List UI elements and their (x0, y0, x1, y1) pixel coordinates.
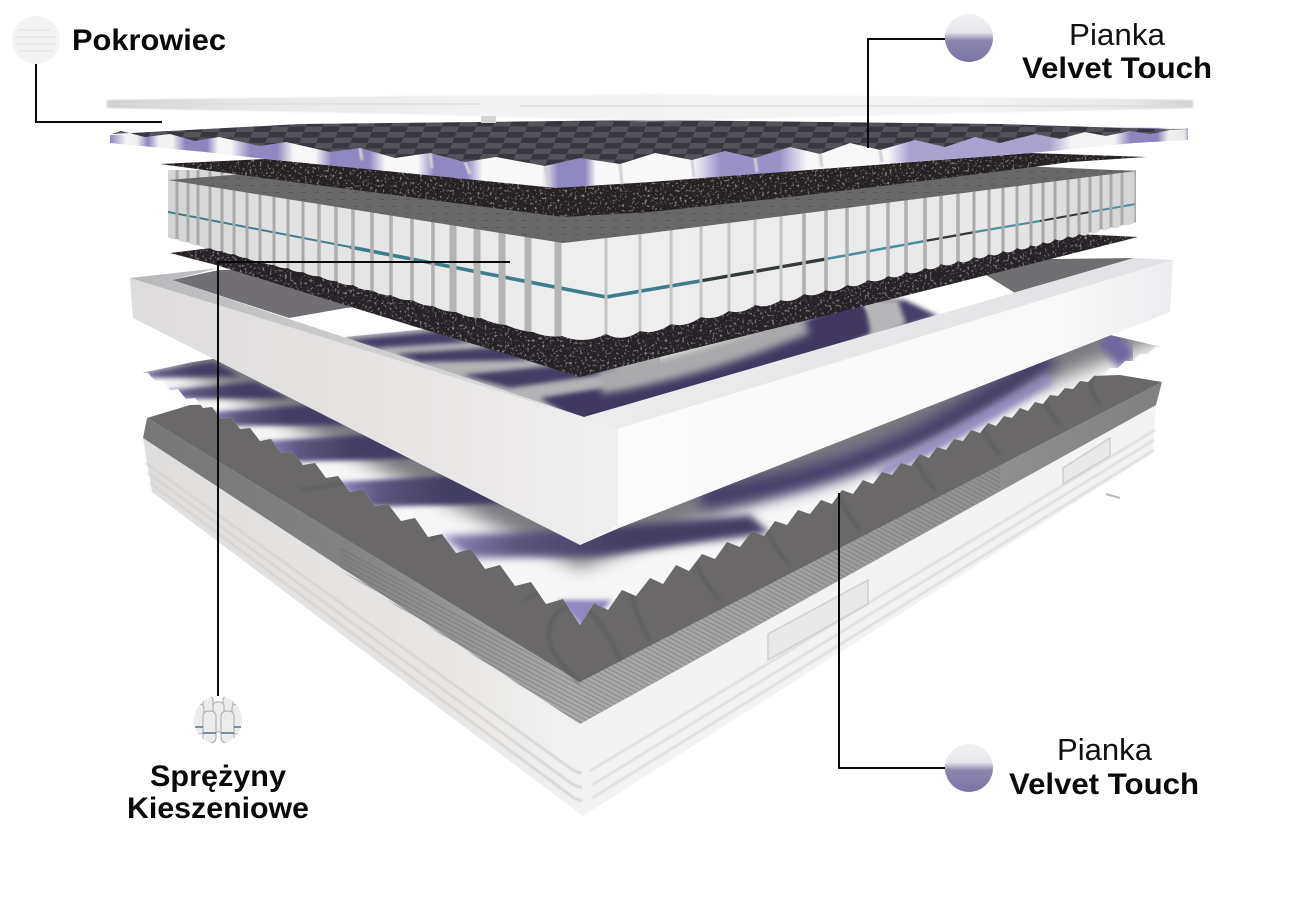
mattress grey mesh band (143, 382, 1162, 724)
icon: pocket springs sample (193, 696, 243, 744)
upper foam: Velvet Touch (110, 120, 1190, 188)
callout: Pianka Velvet Touch bottom (945, 732, 1199, 801)
connector lines (36, 39, 945, 768)
upper felt sheet (160, 153, 1146, 217)
mattress left side (143, 438, 592, 816)
label Pianka top: Pianka (1069, 17, 1166, 52)
tip purple (558, 600, 612, 630)
label Kieszeniowe: Kieszeniowe (127, 792, 309, 825)
frame opening view (172, 258, 1134, 417)
foam frame (130, 258, 1173, 545)
cover layer (107, 94, 1193, 123)
foam side (110, 125, 1188, 188)
cover tag (481, 116, 496, 123)
grey swoosh under felt (600, 322, 805, 382)
foam top surface (112, 120, 1190, 166)
lower felt sheet (170, 225, 1138, 377)
base mattress (143, 372, 1162, 816)
mattress quilted top (147, 372, 1162, 682)
label Pianka bottom: Pianka (1057, 732, 1153, 767)
frame top left strip (130, 268, 618, 428)
right swoosh (700, 356, 1050, 498)
spring top grey cover (168, 165, 1136, 243)
frame top right strip (584, 258, 1173, 428)
lower foam: Velvet Touch (142, 335, 1162, 625)
icon: cover fabric (12, 16, 60, 64)
label Pokrowiec: Pokrowiec (72, 24, 226, 57)
frame right face (580, 260, 1173, 545)
spring bands (168, 204, 1136, 297)
spring gaps near (450, 225, 562, 336)
long stripe centre (442, 515, 770, 558)
pocket springs (168, 170, 1136, 340)
label Sprezyny: Sprężyny (150, 760, 286, 793)
purple stripes left (141, 362, 530, 507)
right purple and grey patch (880, 300, 938, 335)
callout: Pianka Velvet Touch top (945, 14, 1212, 85)
shadow under frame (158, 335, 1161, 578)
purple band along frame edge (538, 306, 877, 417)
icon: foam sample bottom (945, 744, 993, 792)
frame left face (130, 278, 618, 545)
callout: Sprezyny Kieszeniowe (127, 696, 309, 825)
label Velvet Touch bottom: Velvet Touch (1009, 768, 1199, 801)
mattress right side with handles (580, 405, 1156, 816)
spring gaps far (176, 170, 1136, 273)
foam side folds (360, 148, 882, 186)
spring gaps mid (317, 194, 960, 307)
icon: foam sample top (945, 14, 993, 62)
label Velvet Touch top: Velvet Touch (1022, 52, 1212, 85)
callout: Pokrowiec (12, 16, 226, 64)
